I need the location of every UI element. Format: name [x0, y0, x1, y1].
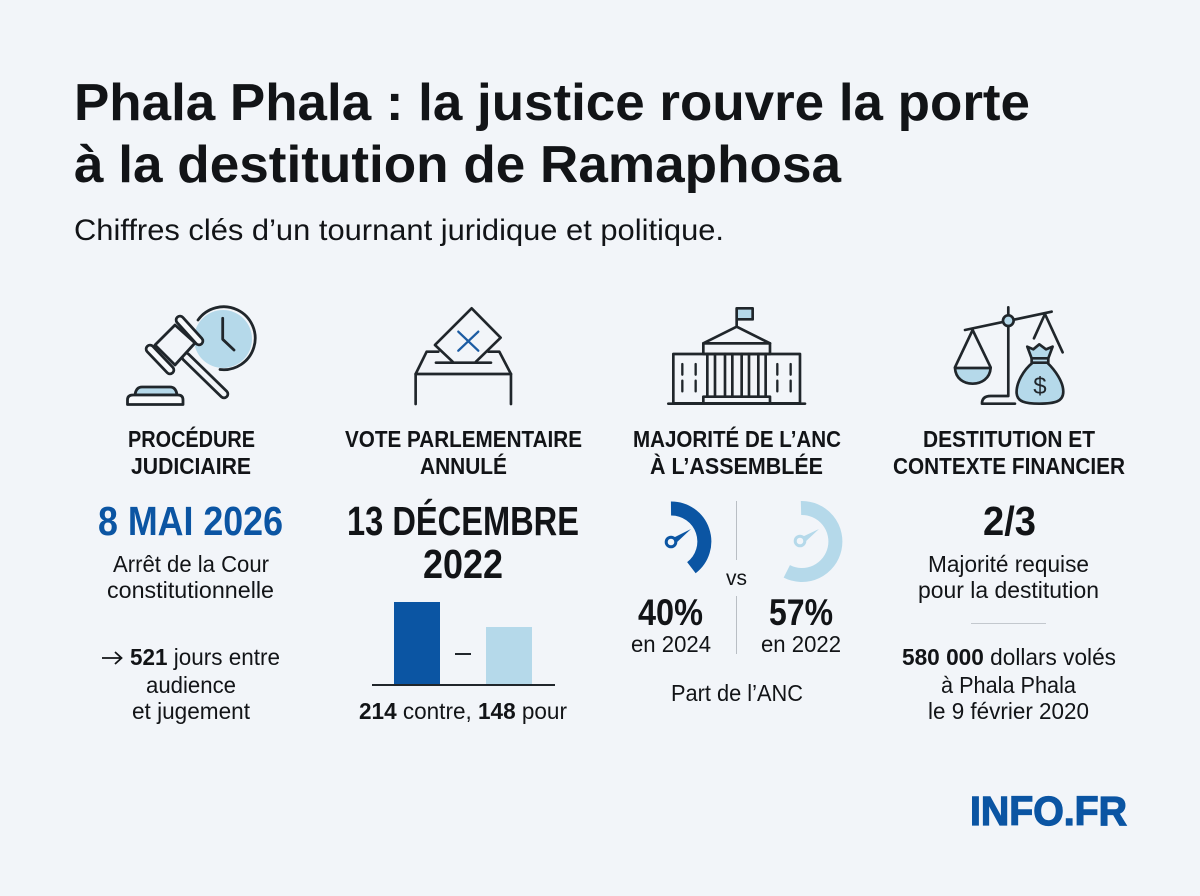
heading: DESTITUTION ET: [923, 426, 1095, 452]
title: [74, 74, 1030, 194]
description: Majorité requise: [928, 551, 1089, 577]
panel: procédure judiciaire: [98, 307, 283, 724]
description: [918, 551, 1099, 603]
title: Phala Phala : la justice rouvre la porte: [74, 74, 1030, 132]
versus label: vs: [726, 567, 747, 590]
duration note: [102, 644, 280, 724]
heading: ANNULÉ: [420, 452, 507, 479]
key figure: date: 13 DÉCEMBRE: [347, 498, 579, 544]
heading: CONTEXTE FINANCIER: [893, 453, 1125, 479]
value 2024: 40%: [638, 592, 703, 633]
heading: [345, 426, 582, 479]
description: constitutionnelle: [107, 577, 274, 603]
gauge: 2024: [666, 508, 704, 568]
gauge: 2022: [787, 508, 835, 575]
panel: vote parlementaire annulé: [345, 308, 582, 724]
key figure: date: [347, 498, 579, 587]
value 2024: [631, 592, 711, 657]
logo: INFO.FR: [970, 788, 1127, 834]
description: Arrêt de la Cour: [113, 551, 269, 577]
value 2022: [761, 592, 841, 657]
stolen money note: le 9 février 2020: [928, 698, 1089, 724]
duration note: et jugement: [132, 698, 251, 724]
icon: ballot box: [416, 308, 511, 404]
heading: MAJORITÉ DE L’ANC: [633, 425, 841, 452]
panel: destitution et contexte financier: [893, 307, 1125, 724]
stolen money note: à Phala Phala: [941, 672, 1076, 698]
key figure: date: 8 MAI 2026: [98, 498, 283, 544]
title: à la destitution de Ramaphosa: [74, 136, 842, 194]
vote count: 214 contre, 148 pour: [359, 698, 567, 724]
value 2024: en 2024: [631, 631, 711, 657]
icon: gavel and clock: [128, 307, 255, 404]
panel: majorité de l'ANC: [631, 308, 841, 706]
icon: parliament building: [668, 308, 805, 404]
subtitle: Chiffres clés d’un tournant juridique et politique.: [74, 214, 724, 247]
key figure: two thirds: 2/3: [983, 498, 1036, 544]
stolen money note: 580 000 dollars volés: [902, 644, 1116, 670]
icon: scales and money bag: [955, 307, 1063, 404]
key figure: date: 2022: [423, 541, 503, 587]
stolen money note: [902, 644, 1116, 724]
bar chart: votes: [372, 602, 555, 686]
duration note: audience: [146, 672, 236, 698]
heading: PROCÉDURE: [128, 425, 255, 452]
dividers: [736, 501, 737, 654]
duration note: 521 jours entre: [130, 644, 280, 670]
icon: scales and money bag: $: [1033, 373, 1047, 400]
heading: [128, 425, 255, 479]
heading: JUDICIAIRE: [131, 453, 251, 479]
value 2022: 57%: [769, 592, 833, 633]
description: [107, 551, 274, 603]
heading: [633, 425, 841, 479]
heading: [893, 426, 1125, 479]
value 2022: en 2022: [761, 631, 841, 657]
heading: À L’ASSEMBLÉE: [650, 452, 823, 479]
caption: Part de l’ANC: [671, 680, 803, 706]
description: pour la destitution: [918, 577, 1099, 603]
heading: VOTE PARLEMENTAIRE: [345, 426, 582, 452]
